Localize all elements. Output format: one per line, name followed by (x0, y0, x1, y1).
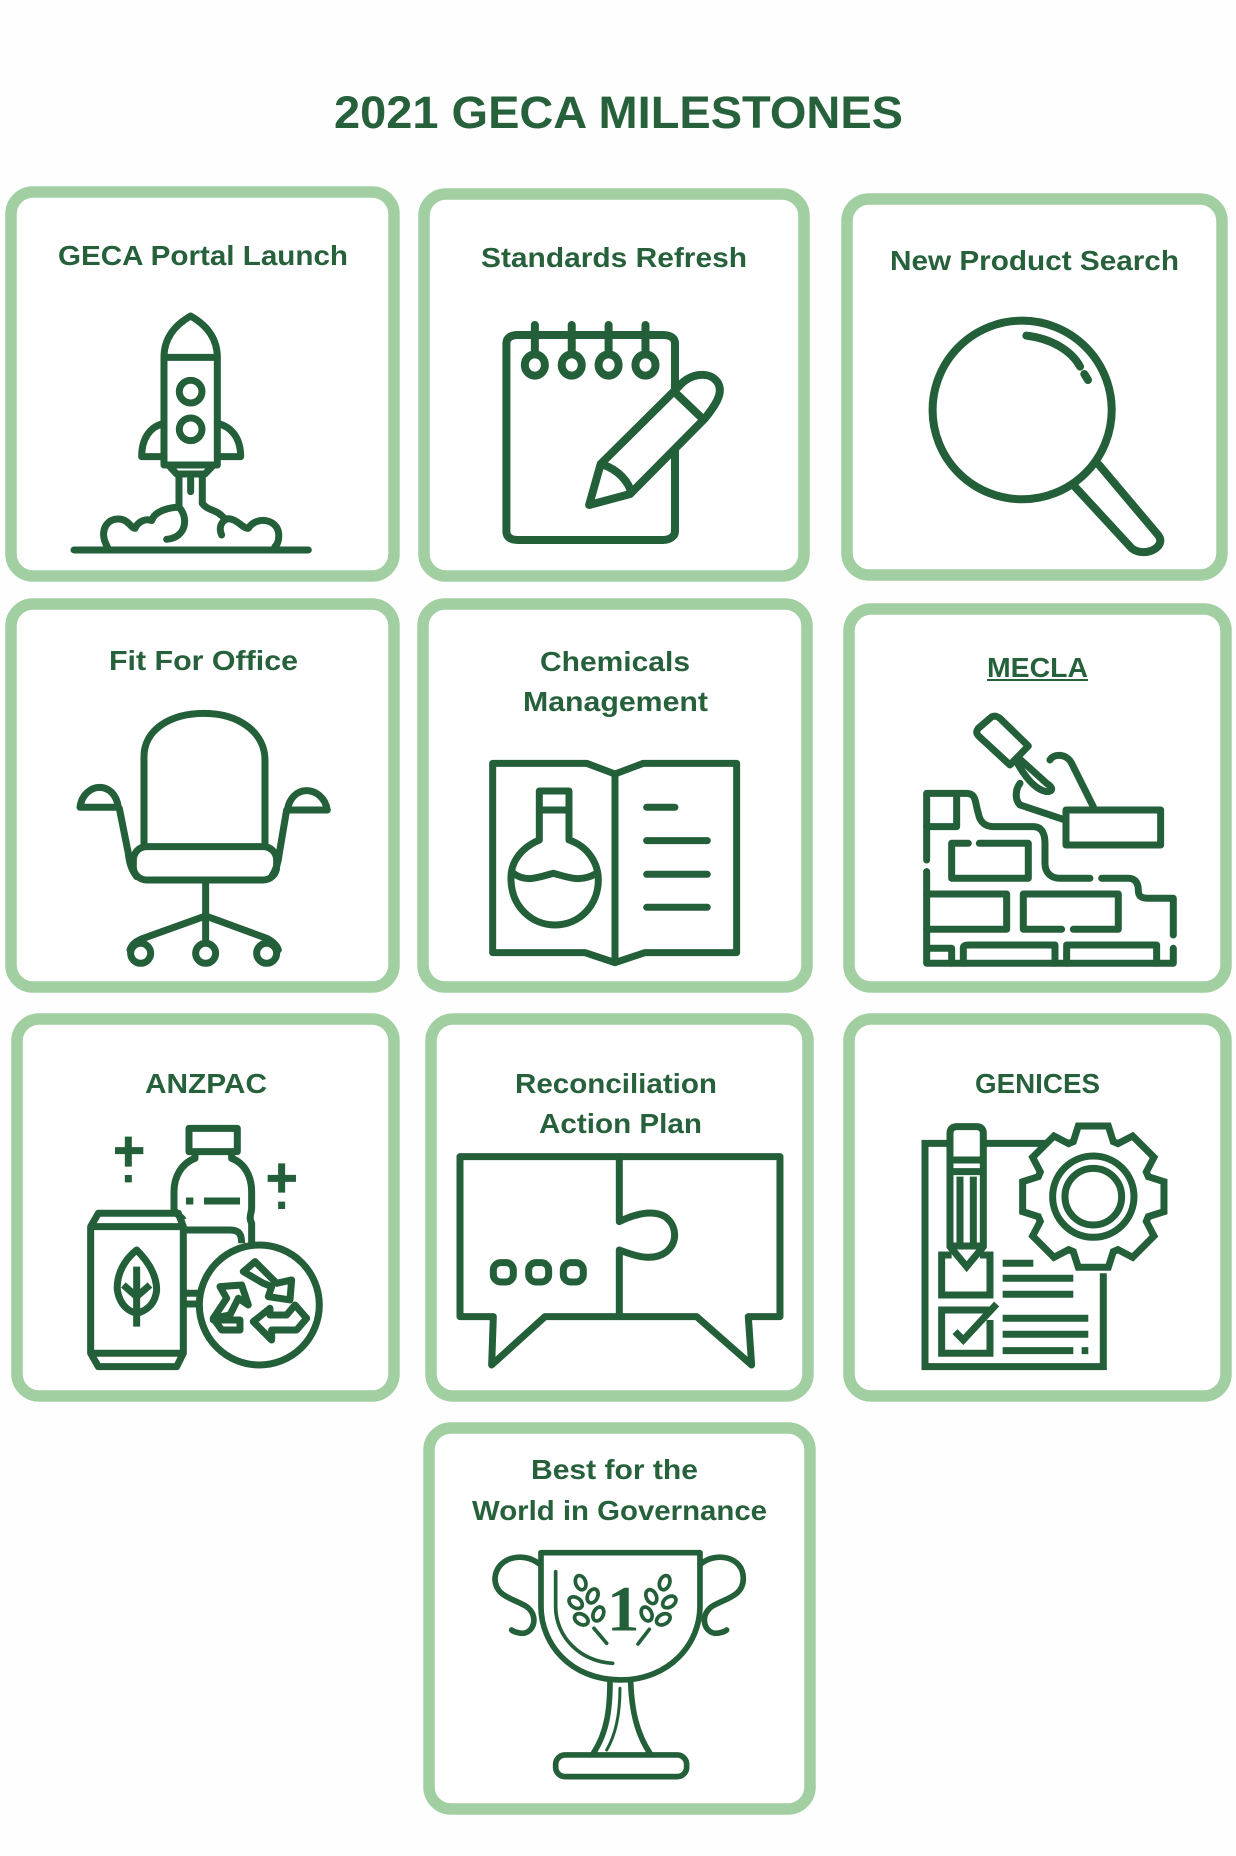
title: 2021 GECA MILESTONES (334, 87, 903, 138)
panel: GENICES (849, 1019, 1226, 1396)
label: ANZPAC: ANZPAC (145, 1068, 267, 1099)
icon: magnifying glass (933, 321, 1160, 552)
label: Reconciliation Action Plan: Reconciliation (515, 1068, 717, 1099)
label: Reconciliation Action Plan: Action Plan (539, 1108, 702, 1139)
label: Best for the World in Governance: Best for the (531, 1454, 698, 1485)
label: Chemicals Management: Chemicals (540, 646, 690, 677)
panel: New Product Search (847, 199, 1222, 575)
panel: MECLA (849, 609, 1226, 987)
icon: trophy (495, 1553, 743, 1777)
label: Standards Refresh: Standards Refresh (481, 242, 747, 273)
icon: document, pencil and gear (925, 1126, 1164, 1367)
panel: Fit For Office (11, 604, 394, 987)
label: Best for the World in Governance (472, 1454, 767, 1526)
label: Fit For Office: Fit For Office (109, 645, 298, 676)
icon: trowel and brick wall (927, 716, 1173, 963)
icon: bottle, can and recycling (91, 1128, 319, 1367)
icon: puzzle speech bubbles (460, 1157, 780, 1365)
panel: GECA Portal Launch (11, 192, 394, 576)
panel: ANZPAC (17, 1019, 394, 1396)
icon: book with flask (493, 763, 737, 963)
icon: trophy: 1 (607, 1574, 640, 1646)
label: GENICES: GENICES (975, 1068, 1100, 1099)
icon: rocket (74, 316, 308, 550)
icon: notepad and pencil (506, 325, 720, 540)
label: MECLA: MECLA (987, 652, 1088, 683)
panel: Reconciliation Action Plan (431, 1019, 808, 1396)
label: GECA Portal Launch: GECA Portal Launch (58, 240, 348, 271)
panel: Best for the World in Governance (429, 1428, 810, 1809)
label: New Product Search: New Product Search (890, 245, 1179, 276)
label: Chemicals Management (523, 646, 708, 717)
label: Chemicals Management: Management (523, 686, 708, 717)
icon: office chair (80, 713, 327, 963)
label: Best for the World in Governance: World in Governance (472, 1495, 767, 1526)
panel: Chemicals Management (423, 604, 807, 987)
label: Reconciliation Action Plan (515, 1068, 717, 1139)
panel: Standards Refresh (424, 194, 804, 576)
